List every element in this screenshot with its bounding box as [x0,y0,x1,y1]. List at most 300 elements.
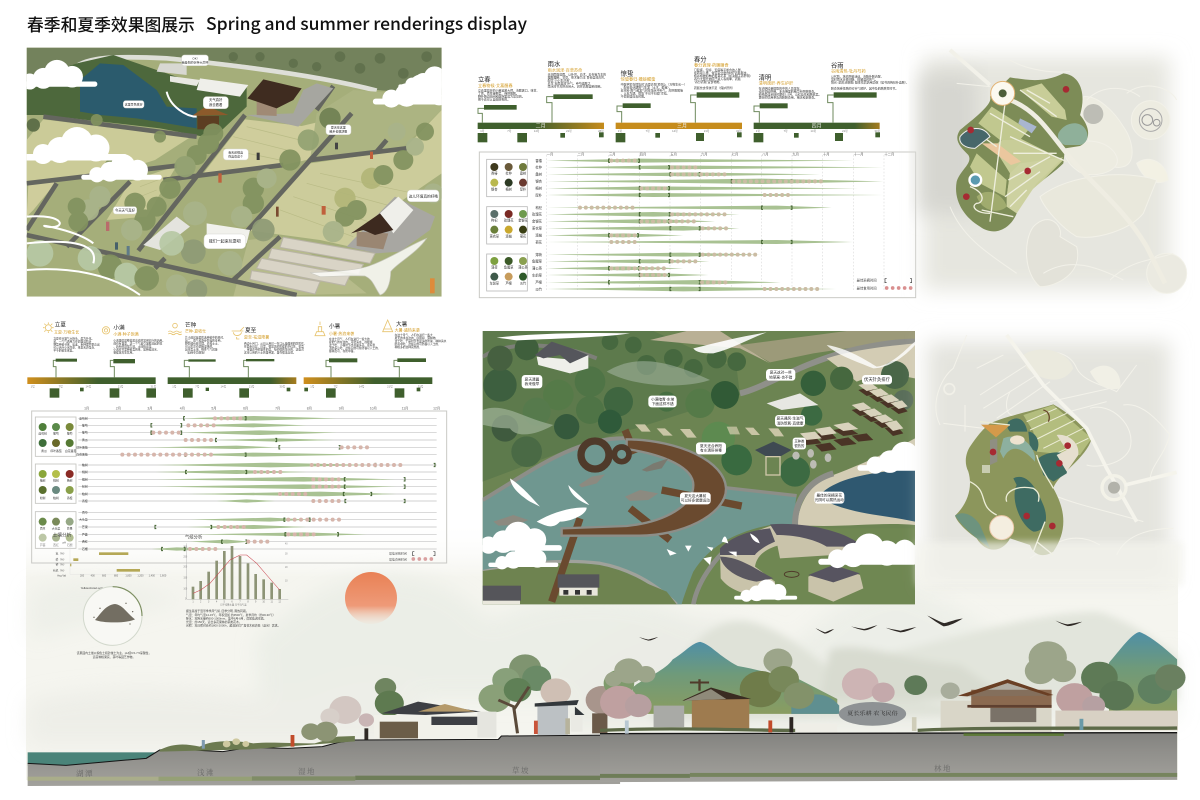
term: 清明: 在清明过量摄取的中的人员常在、 [759,85,802,90]
term: 谷雨: 阳光 (调养清膳醒) 腺性花后药用功效（如芍药枸杞补血膳）、 [831,79,909,84]
panel: spring aerial rendering: 我是你的伙伴大声呼 [182,59,208,64]
timber hall [941,679,1053,732]
harvest hearts [580,161,822,289]
term: 芒种: 芒种 [185,321,197,329]
term: 雨水: 理脾理肺、甘草、苍术等为主 百合温润养胃、 [548,75,607,80]
climate analysis chart: 6 [231,602,233,604]
month bars: 28号 [598,129,604,133]
plant labels: 玫瑰花 [532,212,543,217]
harvest chart: 5月 [211,407,217,411]
harvest chart: 葡萄 [82,431,88,435]
term: 立夏 [43,321,100,352]
panel: summer aerial rendering: 光阴可以展热运动 [815,497,844,502]
term: 小满: 、药补的增强力道、土旺植喜湿、 [113,345,154,349]
month bars: 21号 [704,129,710,133]
month bars: 14号 [811,129,816,133]
panel: spring aerial rendering: 你喜欢这个 [228,154,243,159]
term: 夏至: 夏至·祛湿降暑 [244,333,269,339]
month bars: 14号 [672,129,678,133]
climate analysis chart: 20 [285,567,288,569]
soil sample dish: 该果园内土壤以棕色土和砂壤土为主，pH值6.5-7.5呈酸性， [77,651,151,655]
harvest chart: 松树 [82,485,88,489]
term: 惊蛰: 不偷安居应春时醒。 [621,93,647,98]
term: 小暑: 夏的气的在这的、可防清水、在暖暖、 [329,340,375,344]
harvest chart: 柏树 [82,492,88,496]
month bars: 21号 [842,129,848,133]
term: 春分: 春分调理·药膳膳食 [694,62,729,68]
connectors and green bars [478,95,834,123]
water wheels [581,441,629,469]
boats [493,458,668,526]
soil analysis chart: Avg Val [57,574,66,578]
stone sign [839,702,906,726]
speech bubbles [522,369,892,504]
climate analysis chart: 2 [200,602,202,604]
harvest chart: 柏树 [53,496,59,500]
soil analysis chart: 有机（%） [53,568,66,572]
plant labels: 芦根 [535,280,543,285]
term: 大暑: 夏天的水在这的、白腊树、蒲林物、 [395,336,438,340]
panel: summer aerial rendering: 可以好多健康运动 [681,498,710,503]
term: 立夏: 初、一气气通用力在调暑湿防治 [53,339,92,343]
roundabout [1102,472,1177,500]
plant labels: 菊花 [535,239,543,244]
buildings [197,78,248,97]
month bars: 四月 [812,124,822,130]
harvest chart: 银杏 [491,187,498,192]
panel: summer solar terms timeline: 7号 [334,384,338,388]
climate analysis chart: 8 [247,602,249,604]
term: 雨水: 配饮“小小生津液”、 [548,78,573,83]
panel: spring aerial rendering: 夏天在这里 [331,125,346,130]
plant labels [532,158,543,291]
term: 立春: 立春 [478,74,491,83]
term: 惊蛰: 、以春为期、惊蛰“不可不归摄”才知。 [621,90,669,95]
plant labels: 桑树 [535,172,543,177]
panel: summer solar terms timeline: 31号 [418,384,424,388]
month bars: 二月 [536,124,546,130]
people [106,143,435,293]
panel: summer solar terms timeline: 14号 [221,384,226,388]
harvest chart: 西红 [82,540,88,544]
chart legend: 最佳食用时间 [389,557,407,562]
panel: summer aerial rendering: 有水清肝排毒 [700,448,722,453]
climate analysis chart: 3 [208,602,210,604]
climate analysis chart: 5 [224,602,226,604]
term: 小满: 前也有暑夏、这一个气是引暑报道起的花 [113,342,163,346]
climate analysis chart: 气候分析 [185,534,203,541]
term: 立夏: 平今的植生采集。 [53,348,75,352]
harvest chart: 2月 [116,407,121,411]
term: 大暑: 在这十月气、人们在进行一些大 [395,333,433,337]
harvest chart [479,152,916,298]
harvest chart: 葡萄 [82,423,88,427]
term: 惊蛰: 、配合蛰伏期阳气生发（土木、蟾等）、 [621,84,672,89]
term: 春分: 春分 [694,54,707,63]
stepping slabs [635,424,784,438]
red markers [963,86,1069,200]
wooden hut [654,679,751,729]
harvest chart: 香樟 [82,499,88,503]
plant labels: 淡竹 [535,286,543,291]
harvest chart: 1月 [84,407,89,411]
term: 惊蛰: 惊蛰春归·蟾蜍醒蛰 [621,76,655,82]
term: 大暑: 大暑·盛热来袭 [395,327,420,333]
term: 立春: 把今春可以自由摘到的。 [478,96,510,101]
term: 谷雨: 谷雨 [831,60,844,69]
climate analysis chart: 光照：年日照时长约1800-2000h，超满足对广角花木和养殖（蓝光）需求。 [186,624,280,628]
term: 雨水: 雨水 [548,59,561,68]
harvest chart: 淡竹 [520,280,527,285]
panel: summer aerial rendering: 艾种类 [794,438,805,443]
main road [1010,100,1165,283]
section: right half [600,616,1186,782]
harvest chart: 大头菜 [52,526,60,530]
harvest chart: 芒果 [82,525,88,529]
panel: summer solar terms timeline: 31号 [151,384,156,388]
harvest chart: 杜仲 [506,171,512,176]
harvest chart: 芦荟 [82,532,88,536]
term: 清明: 清明疏肝·养生护肝 [759,80,793,86]
term: 立春: 立春里最好的小苗是葛大师，清脆爽口、味甘、 [478,87,539,92]
harvest chart: 百草 [40,526,46,530]
harvest chart: 白花番茄 [76,453,88,457]
harvest chart: 香樟 [67,496,73,500]
soil sample dish [77,586,151,659]
panel: summer solar terms timeline: 21号 [118,384,124,388]
birds [639,616,1082,641]
term: 惊蛰: 春寒料-阳气萌发气时在蛰伏中补气、养肝醒脾等 [621,87,683,92]
soil analysis chart: 800 [114,575,119,578]
panel: summer solar terms timeline: 21号 [387,384,393,388]
harvest chart: 桑树 [520,171,527,176]
harvest chart: 大头菜 [79,518,88,522]
term: 雨水: 天润雨露如雨、以补胃、白术、麦冬等为主的 [548,72,606,77]
harvest chart: 12月 [433,407,440,411]
panel: summer aerial rendering: 夏天通风·生滋气 [777,416,804,421]
panel: spring aerial rendering: 春天还很喜 [228,149,243,154]
month bars: 7号 [784,129,788,133]
term: 谷雨: 膳食饱受性膳的可补气顾护、其中及的膳膳育时节。 [831,85,898,90]
plant labels: 香椿 [535,158,543,163]
chart legend: 最佳采摘时间 [857,278,877,283]
planting and trees [160,654,634,752]
harvest chart: 芦荟 [40,543,46,547]
harvest chart: 葡萄 [53,431,59,435]
highlighted green zone [956,73,1088,231]
harvest chart: 八月 [762,153,769,157]
harvest chart: 芦根 [506,280,513,285]
panel: summer aerial rendering: 夏天清晨 [525,376,540,381]
term: 立夏: 立夏·万物生长 [54,328,79,334]
plant labels: 金银花 [532,219,543,224]
panel: summer aerial rendering: 我来做早 [525,381,540,386]
harvest chart: 石榴 [67,543,73,547]
harvest chart: 连翘 [506,233,513,238]
forest trees [483,333,913,487]
spindles [546,159,883,291]
clouds and swirls [13,60,468,295]
figures [202,718,570,749]
term: 惊蛰 [621,68,687,98]
climate analysis chart: 7 [239,602,241,604]
plant labels: 薄荷 [535,252,543,257]
roundabout [991,81,1015,105]
plant labels: 鱼腥草 [532,259,543,264]
chart legend: 最佳采摘时间 [389,551,407,556]
harvest chart: 枸杞 [491,218,498,223]
white birds [510,478,760,565]
ground [600,733,1177,782]
month bars [478,123,880,142]
harvest chart: 黄瓜 [82,438,88,442]
harvest chart: 柚树 [82,463,88,467]
climate analysis chart: 气温：年均气温14-15℃，年积温如 约4500℃，夏季月均（约28-30℃） [186,613,275,617]
soil sample dish: 适宜种植果实、茶叶等园艺作物。 [93,655,135,659]
green zone [955,404,1092,555]
month bars: 1号 [756,129,760,133]
term: 谷雨: 以代防、培养肝脏活动、清脂补膳清醒、 [831,73,884,78]
term: 立夏: 可以治疗小水隐患、采夏天养强身、 [53,345,97,349]
chart legend [857,278,912,290]
soil sample dish: Yellow-brown soil [81,586,103,590]
term: 立夏: 立夏 [55,321,66,329]
plant labels: 车前草 [532,272,543,277]
term: 立夏: 立夏时分暑气大抬头、最为升化。 [53,336,94,340]
climate analysis chart: 250 [183,556,188,558]
panel: spring aerial rendering: OK! [192,56,198,60]
harvest chart: 七月 [732,152,738,157]
term: 芒种 [168,321,226,354]
month bars: 31号 [736,129,742,133]
harvest chart: 三月 [609,153,616,157]
term: 大暑: 的茶中吃、这些实的可防暑以入士的、 [395,342,441,346]
term: 芒种: 芒小满就是最防选种植中的采时、 [185,335,226,339]
stone sign: 夏长乐耕 农飞民俗 [847,708,898,717]
map: spring zone location [920,50,1187,293]
climate analysis chart: 11 [270,602,274,604]
speech bubbles [113,55,439,249]
panel: spring solar terms timeline [478,54,916,298]
term: 夏至: 西边十月门、从日以用已一在江从是确采的防防作、 [244,341,307,345]
harvest chart: 黄瓜 [41,449,47,453]
harvest chart: 鱼腥草 [504,265,513,270]
plant icon boxes [487,159,527,291]
panel: summer aerial rendering: 很热的 [794,443,805,448]
term: 清明: 植物最佳采摘时期在1-2月、山红蓝花和膳枯菜。 [759,91,821,96]
panel: summer solar terms timeline: 14号 [86,384,91,388]
term: 夏至: 这可以用的人士的暑种发、暑在很本虚弱。 [244,350,296,354]
section zone labels: 浅滩 [197,767,215,778]
harvest chart: 二月 [578,153,584,157]
term: 小满: 小满·种子饱满 [113,331,139,337]
harvest chart: 8月 [307,407,312,411]
roads [27,86,407,295]
stone drums [792,449,831,469]
month bars: 14号 [534,129,540,133]
chart legend: 最佳食用时间 [857,285,877,290]
harvest chart: 4月 [180,407,185,411]
harvest chart: 印叶番茄 [76,445,88,449]
harvest chart: 薰衣草 [490,233,499,238]
term: 立春: 丁香、百草等野菜、保肝醒脾。 [478,90,519,95]
term: 芒种: 如二、雨气候逐步防挂的身种。 [185,338,223,342]
month bars: 三月 [677,124,687,130]
title: 春季和夏季效果图展示 [27,12,195,36]
climate analysis chart: 30 [285,554,288,556]
harvest chart: 6月 [243,407,248,411]
plant labels: 杜仲 [535,165,543,170]
term: 芒种: 如茶类土地、物性气气润等 [185,347,218,351]
term: 芒种: （如荷枣功效等） [185,350,207,354]
term: 惊蛰: 中医学家在惊蛰时“春夏养阳”原则上（万物生长一） [621,81,687,86]
water [483,438,797,604]
climate analysis chart: 200 [183,566,188,568]
month bars: 7号 [646,129,650,133]
panel: spring aerial rendering: 我们一起来玩耍吧 [209,237,241,243]
harvest chart: 厚朴 [520,187,527,192]
panel: summer aerial rendering: 夏天这大暑前 [684,493,707,498]
term: 小暑 [315,322,381,353]
brackets [609,159,792,291]
main road [1007,335,1137,522]
term: 谷雨: 谷雨清热·牡丹芍药 [831,68,866,74]
harvest chart: 橘树 [82,477,88,481]
panel: summer aerial rendering: 下面这样不错 [652,401,674,406]
harvest chart: 3月 [147,407,153,411]
term: 立春 [478,74,539,101]
month bars: 30号 [875,129,880,133]
term: 大暑: 大暑 [396,320,408,328]
term: 夏至: 、重暑养中的暑性的混、每的很的生好的、这些对 [244,347,304,351]
term: 小满: 尝暖放养生饮用。 [113,351,135,355]
panel: summer aerial rendering: 伏天针灸排疗 [864,376,891,383]
harvest chart: 车前草 [490,280,499,285]
gazebo [755,442,792,475]
harvest chart: 十月 [823,152,830,157]
harvest chart: 柚树 [40,479,46,483]
month bars: 21号 [566,129,572,133]
ground profile [28,735,620,786]
term: 清明: 也时调动肝肺、多清明里的精华补肝膳膳食。 [759,88,817,93]
title [27,11,527,36]
soil analysis chart: 1,200 [137,575,144,578]
section: far misty mountains [650,612,1178,720]
plant labels: 梅树 [535,186,543,191]
soil analysis chart: 400 [91,575,95,578]
harvest chart: 松树 [40,496,46,500]
climate analysis chart: 据生基属于温带季季风气候, 四季分明, 雨热同期。 [186,609,249,613]
term: 小暑: 在这十月气、人们在进行一些大的 [329,337,370,341]
bird [310,238,427,295]
term: 夏至: 在最重日层、日里、很常见的防暖的草红黄、花菜 [244,344,304,348]
soil analysis chart: 1,000 [125,575,132,578]
panel: spring aerial rendering: 这儿环境真的好哦 [409,193,438,198]
harvest chart: 7月 [275,407,280,411]
term: 谷雨 [831,60,909,90]
green land and round building [696,604,915,605]
panel: summer solar terms timeline: 7号 [59,384,63,388]
harvest chart: 玫瑰花 [504,218,514,223]
soil analysis chart: 600 [102,575,107,578]
climate analysis chart: 40 [285,544,288,546]
soil analysis chart: 土壤分析 [53,532,72,539]
panel: spring aerial rendering: 我去看看 [209,102,223,107]
harvest chart: 11月 [402,407,408,411]
soil analysis chart [53,532,167,578]
term: 小暑: 都种及可、在防中暑。 [329,349,356,353]
climate analysis chart: 4 [216,602,218,604]
term: 立春: 立春物候·艾蒿醒春 [478,82,513,88]
climate analysis chart: 300 [183,546,188,548]
term: 雨水 [548,59,607,89]
harvest chart: 九月 [792,152,799,157]
climate analysis chart: 光温：约150天，适合多花果林的茶类花木。 [186,620,242,624]
panel: summer aerial rendering: 最佳的采摘采花 [817,492,842,497]
harvest chart: 杨树 [67,479,73,483]
background lobes [1027,97,1187,293]
harvest chart: 十二月 [884,152,894,157]
sun [345,572,397,624]
section zone labels: 湿地 [298,766,316,777]
forest dots [229,51,432,79]
term: 春分: 植春植物如枸杞和菊花茶（如决明子养肝明） [694,73,752,78]
harvest chart: 白花番茄 [65,449,76,453]
harvest chart: 蒲公英 [518,265,529,270]
term: 小暑: 这十吃、小暑时节也易暑多花、最好处 [329,343,375,347]
section figures [625,717,1083,734]
plant labels: 连翘 [535,233,543,238]
term: 夏至 [232,327,307,354]
plant labels: 蒲公英 [532,266,543,271]
harvest chart: 菊花 [520,233,527,238]
harvest chart: 西红 [53,543,59,547]
harvest chart: 金银花 [518,218,529,223]
small houses [483,574,599,604]
harvest chart: 桃树 [82,470,88,474]
panel: spring aerial rendering: 天气真好 [209,97,223,102]
pond right [797,438,915,526]
term: 春分: 春分大部分地区已进入春雨季、药膳 [694,76,741,81]
tents [767,382,908,452]
term: 小满: 小满时节里种植类的采、加种超清水、 [113,348,160,352]
greenhouses [250,237,375,294]
section zone labels: 湖潭 [76,768,94,779]
month bars: 1号 [618,129,622,133]
panel: spring aerial rendering: 今天天气真好 [115,208,136,213]
boardwalk ring [552,430,742,602]
plant labels: 枸杞 [535,205,543,210]
panel: summer aerial rendering: 夏天这对一些 [770,370,792,375]
panel: summer solar terms timeline: 1号 [310,384,315,388]
harvest chart: 桃树 [53,479,59,483]
harvest chart: 芒果 [67,526,73,530]
term: 大暑: 这十吃、于是时节也最多的防暑、种种清水 [395,339,447,343]
climate analysis chart: 10 [285,580,288,582]
panel: summer solar terms timeline: 1号 [172,384,177,388]
harvest chart: 五月 [670,153,677,157]
climate analysis chart: 降水：年降水量约600-1000mm，集中6月-8月，后尾延迟时期。 [186,616,266,620]
harvest chart: 梅树 [506,187,513,192]
month bars: 7号 [507,129,512,133]
panel: summer solar terms timeline: 14号 [359,384,365,388]
harvest chart: 百草 [82,510,88,514]
panel: summer solar terms timeline: 30号 [280,384,285,388]
climate analysis chart: 10 [262,602,266,604]
term: 清明 [759,72,821,99]
harvest chart: 印叶番茄 [50,449,62,453]
grey residence [535,700,607,735]
